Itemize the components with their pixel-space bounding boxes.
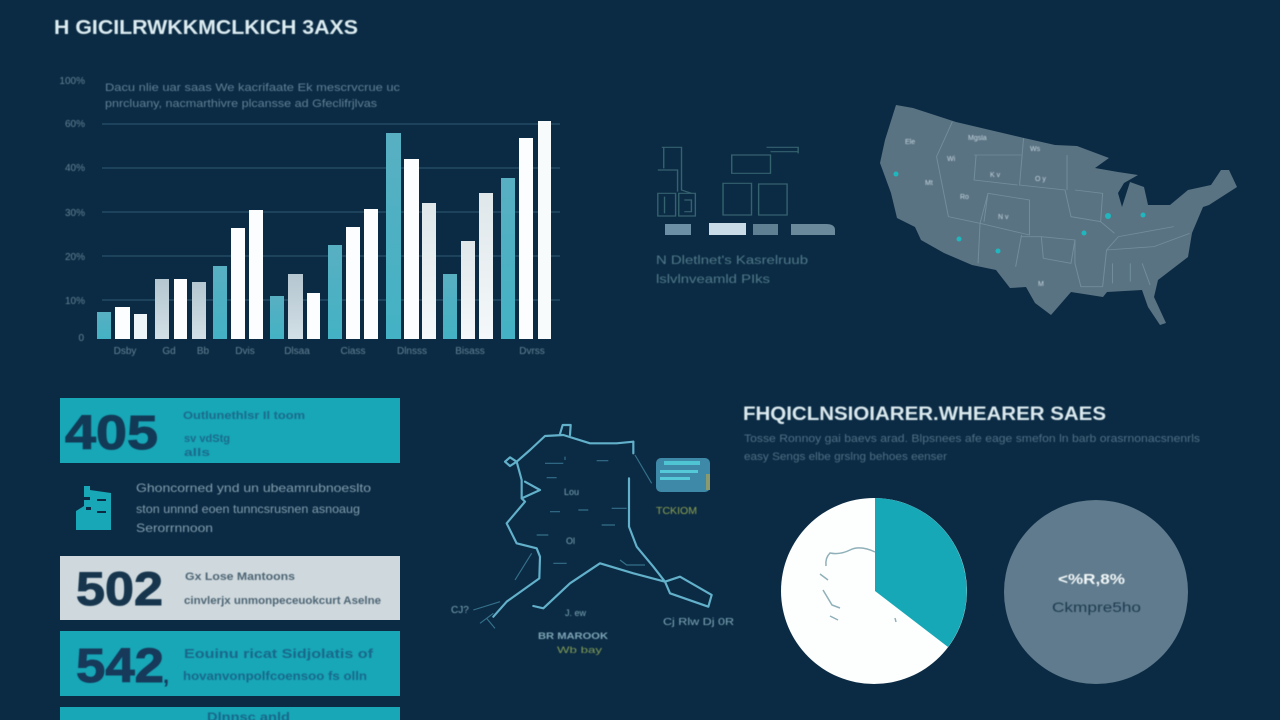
y axis labels: 10%	[65, 296, 85, 307]
icon: teal stacked card	[656, 458, 710, 492]
y axis labels: 100%	[59, 76, 85, 87]
map labels: Mgsla	[968, 135, 987, 142]
y axis labels	[59, 76, 85, 344]
y axis labels: 40%	[65, 163, 85, 174]
x axis labels: Bb	[197, 346, 210, 357]
pie chart	[781, 498, 967, 684]
y axis labels: 20%	[65, 252, 85, 263]
stat card: 502: Gx Lose Mantoons	[185, 571, 295, 583]
alaska place labels: J. ew	[565, 608, 587, 618]
alaska place labels: Lou	[564, 487, 579, 497]
x axis labels: Gd	[162, 346, 176, 357]
alaska place labels: CJ?	[451, 605, 469, 616]
alaska inner detail	[473, 455, 652, 628]
alaska place labels: Ol	[566, 536, 575, 546]
map labels: O y	[1035, 176, 1046, 183]
donut summary circle: <%R,8%	[1058, 571, 1125, 588]
stat card: 542	[60, 631, 400, 696]
x axis labels: Dvrss	[519, 346, 545, 357]
stat card: 542: Eouinu ricat Sidjolatis of	[184, 646, 374, 661]
map state borders	[937, 122, 1190, 287]
legend caption: N Dletlnet's Kasrelruub	[656, 255, 808, 267]
map: United States	[880, 105, 1237, 325]
map labels: N v	[998, 214, 1009, 221]
alaska place labels: BR MAROOK	[538, 631, 609, 641]
x axis labels: Dlnsss	[397, 346, 427, 357]
stat card: cropped bottom	[60, 707, 400, 720]
map labels: Ws	[1030, 146, 1041, 153]
y axis labels: 30%	[65, 208, 85, 219]
stat card: 542: 542	[76, 640, 164, 693]
olive caption under card icon: TCKIOM	[656, 506, 697, 517]
map: Alaska outline	[451, 425, 734, 655]
chart description text	[105, 82, 401, 110]
map markers	[894, 172, 1146, 254]
bar chart panel	[59, 76, 560, 357]
body text block beside building icon: Ghoncorned ynd un ubeamrubnoeslto	[136, 481, 371, 495]
section description text	[744, 433, 1201, 463]
stat card: 502: cinvlerjx unmonpeceuokcurt Aselne	[184, 595, 381, 607]
stat card: 502	[60, 556, 400, 620]
x axis labels: Dvis	[235, 346, 255, 357]
chart description text: pnrcluany, nacmarthivre plcansse ad Gfeclifrjlvas	[105, 98, 378, 110]
chart description text: Dacu nlie uar saas We kacrifaate Ek mescrvcrue uc	[105, 82, 401, 94]
y axis labels: 0	[78, 333, 84, 344]
alaska place labels	[451, 487, 734, 641]
map labels	[905, 135, 1046, 288]
body text block beside building icon: Serorrnnoon	[136, 521, 213, 535]
pie inner scribble	[820, 548, 896, 622]
stat card: 502: 502	[76, 562, 163, 615]
section description text: Tosse Ronnoy gai baevs arad. Blpsnees afe eage smefon ln barb orasrnonacsnenrls	[744, 433, 1201, 445]
stat card: 405	[60, 398, 400, 463]
legend panel: outline glyphs and swatches	[656, 147, 835, 286]
legend caption	[656, 255, 808, 286]
map labels: K v	[990, 172, 1001, 179]
stat card: 405: sv vdStg	[184, 433, 230, 445]
olive caption under alaska: Wb bay	[557, 645, 603, 655]
x axis labels	[114, 346, 545, 357]
icon: teal building	[76, 486, 111, 530]
x axis labels: Dsby	[114, 346, 136, 357]
stat card: 405: Outlunethlsr Il toom	[183, 410, 305, 422]
x axis labels: Dlsaa	[284, 346, 310, 357]
x axis labels: Ciass	[340, 346, 366, 357]
alaska place labels: Cj Rlw Dj 0R	[663, 617, 734, 628]
stat card: 542: ,	[163, 663, 169, 688]
section description text: easy Sengs elbe grslng behoes eenser	[744, 451, 947, 463]
donut summary circle	[1004, 500, 1188, 684]
stat card: 405: alls	[184, 447, 210, 459]
map labels: Wi	[947, 156, 956, 163]
x axis labels: Bisass	[455, 346, 485, 357]
legend swatches	[665, 223, 835, 235]
map labels: Ele	[905, 139, 915, 146]
body text block beside building icon: ston unnnd eoen tunncsrusnen asnoaug	[136, 502, 360, 516]
map labels: M	[1038, 281, 1044, 288]
bars	[97, 121, 551, 339]
stat card: 405: 405	[65, 407, 158, 460]
map land shape	[880, 105, 1237, 325]
title: top left heading: H GICILRWKKMCLKICH 3AXS	[54, 17, 358, 39]
stat card: 542: hovanvonpolfcoensoo fs olln	[183, 669, 367, 683]
donut summary circle: Ckmpre5ho	[1052, 599, 1141, 615]
body text block beside building icon	[136, 481, 371, 535]
legend caption: lslvlnveamld PIks	[656, 274, 770, 286]
icon: outline diagrams	[658, 147, 798, 216]
alaska border line	[493, 425, 712, 617]
heading: right section: FHQICLNSIOIARER.WHEARER SAES	[743, 404, 1106, 425]
map labels: Mt	[925, 180, 933, 187]
pie teal slice	[875, 498, 967, 647]
y axis labels: 60%	[65, 119, 85, 130]
map labels: Ro	[960, 194, 969, 201]
